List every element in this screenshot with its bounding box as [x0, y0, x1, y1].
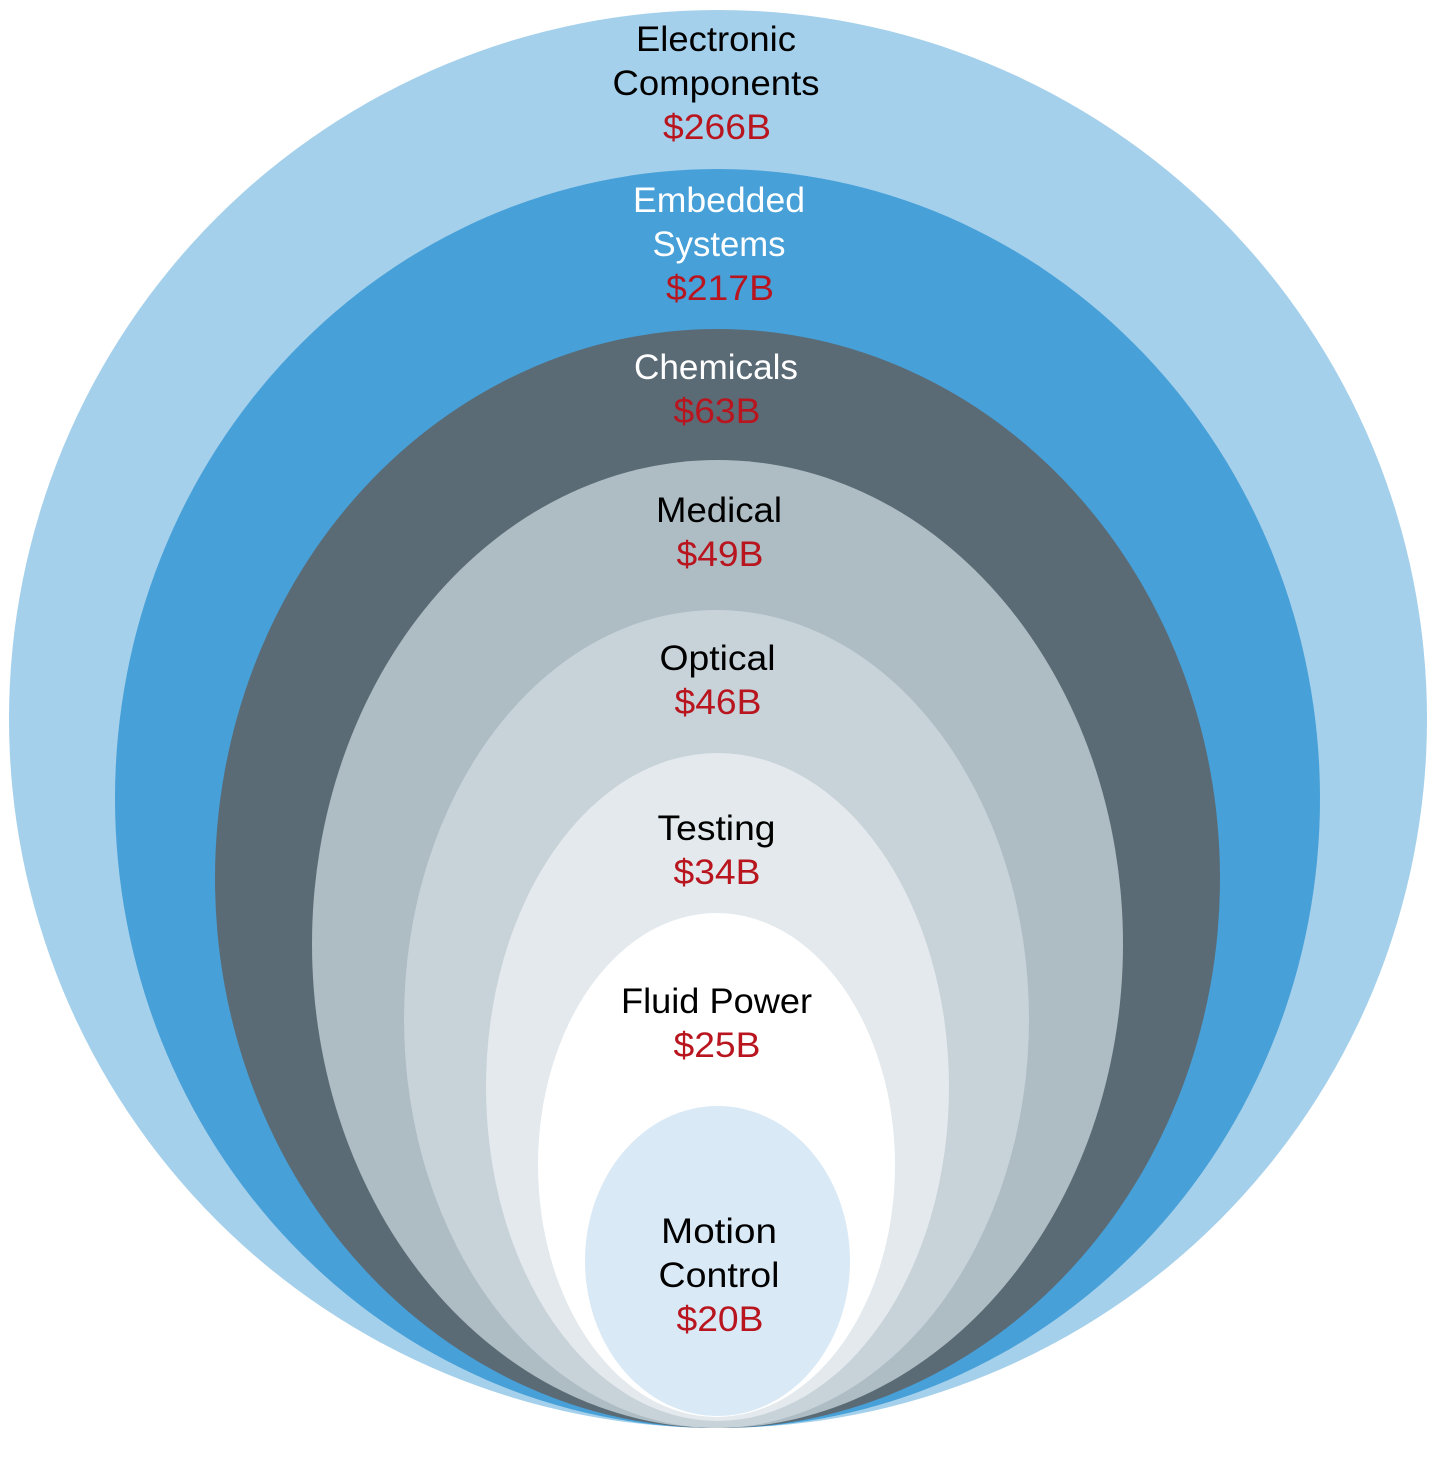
value: $34B: $34B — [674, 853, 760, 892]
label: Testing: Testing — [658, 809, 776, 848]
ring: Embedded Systems — [115, 169, 1320, 1428]
ring: Medical — [312, 460, 1123, 1428]
label: Fluid Power: Fluid Power — [621, 982, 812, 1021]
ring: Testing — [486, 753, 949, 1421]
value: $20B: $20B — [676, 1300, 764, 1339]
label: Optical: Optical — [660, 639, 776, 678]
value: $25B: $25B — [674, 1026, 760, 1065]
ring: Fluid Power — [538, 913, 895, 1417]
label: Electronic: Electronic — [636, 20, 796, 59]
label: Control: Control — [658, 1256, 780, 1295]
label: Chemicals: Chemicals — [634, 348, 798, 387]
value: $63B: $63B — [674, 392, 760, 431]
ring: Optical — [404, 610, 1029, 1428]
label: Systems: Systems — [652, 225, 786, 264]
value: $266B: $266B — [663, 108, 771, 147]
value: $49B: $49B — [676, 535, 764, 574]
value: $46B: $46B — [674, 683, 762, 722]
label: Medical: Medical — [656, 491, 782, 530]
ring: Motion Control — [585, 1106, 850, 1416]
ring: Chemicals — [215, 329, 1220, 1428]
label: Components: Components — [612, 64, 820, 103]
label: Embedded: Embedded — [633, 181, 805, 220]
label: Motion: Motion — [661, 1212, 777, 1251]
value: $217B: $217B — [666, 269, 774, 308]
